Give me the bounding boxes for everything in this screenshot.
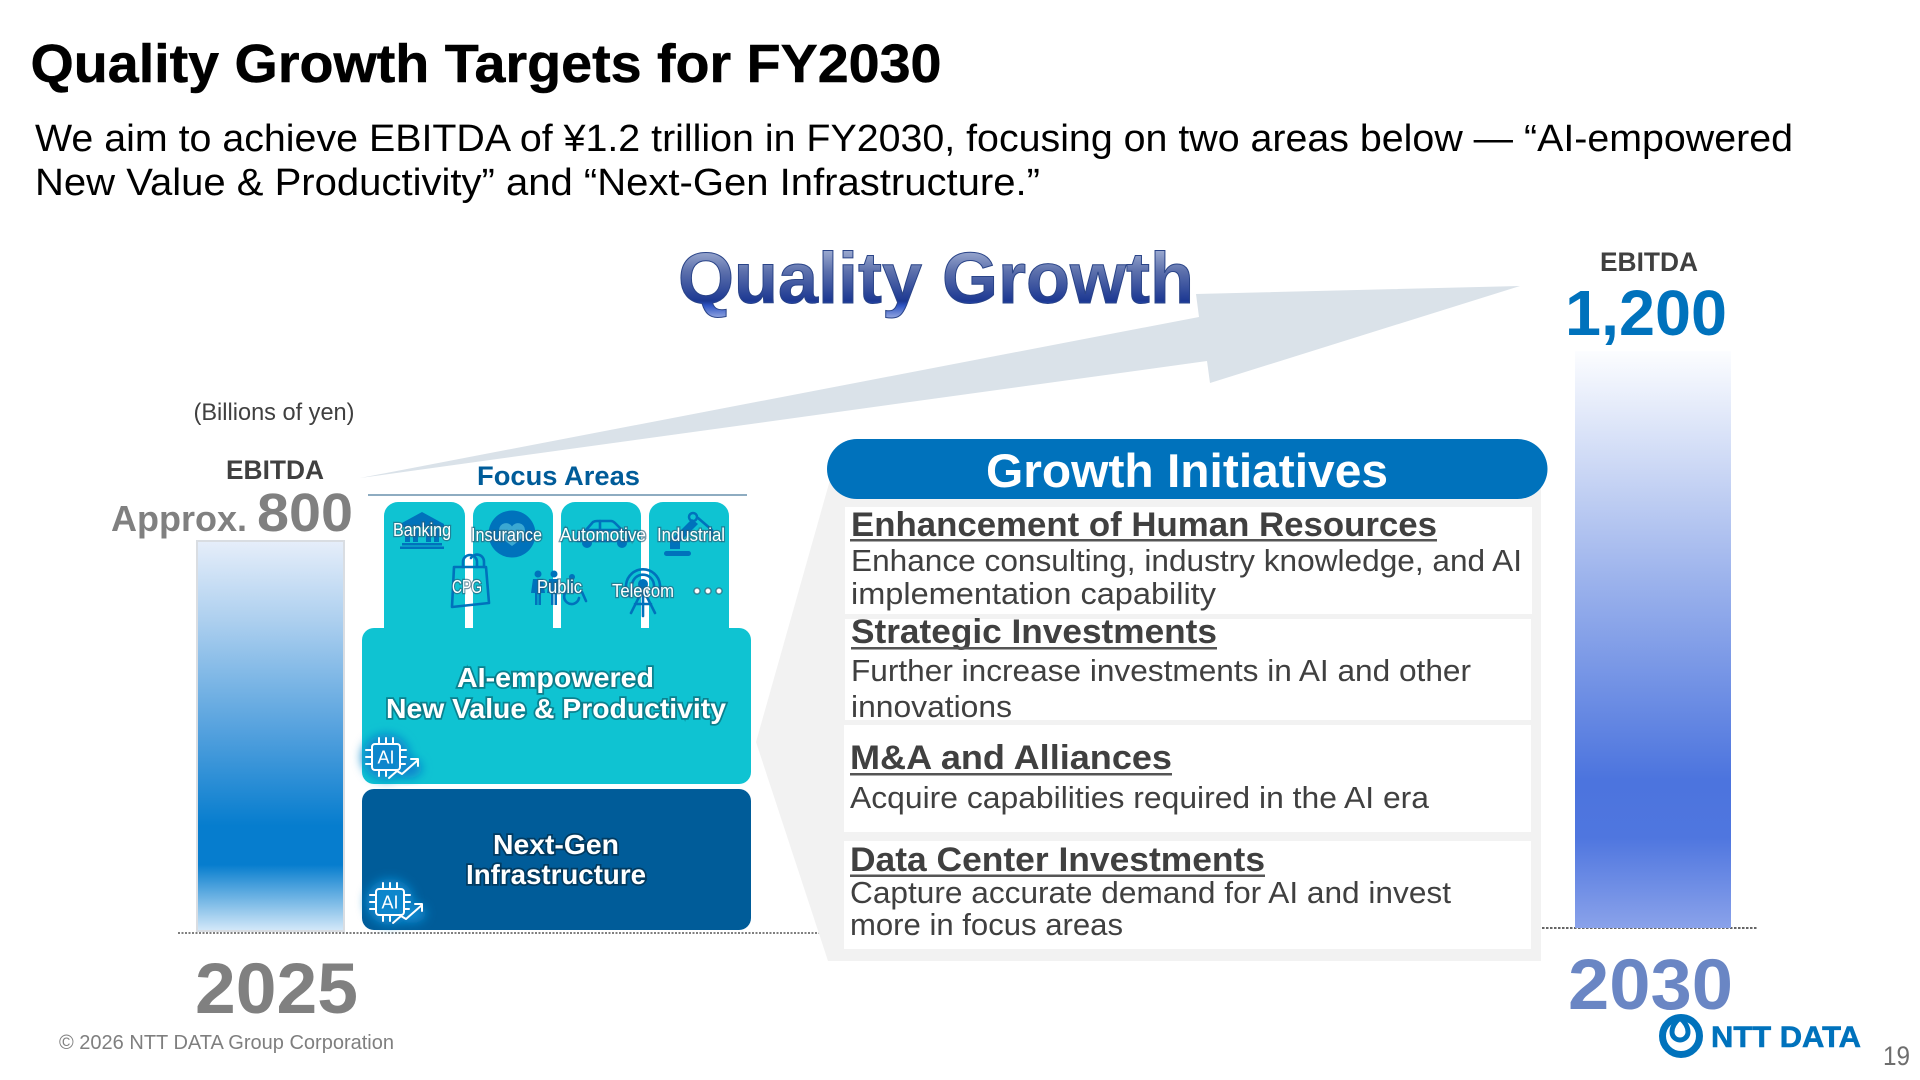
value 2030: 1,200 — [1565, 277, 1727, 349]
value 2025 — [111, 483, 353, 543]
growth initiatives header — [827, 439, 1548, 499]
focus labels: Telecom — [612, 581, 674, 601]
block label: next-gen: Next-Gen — [493, 829, 619, 860]
subtitle text block: We aim to achieve EBITDA of ¥1.2 trillion in FY2030, focusing on two areas below — “AI-empowered — [35, 118, 1793, 160]
value 2025: Approx. — [111, 498, 247, 539]
NTT DATA logo — [1662, 1018, 1861, 1054]
item: strategic investments: Further increase investments in AI and other — [851, 653, 1471, 688]
header label: Growth Initiatives — [986, 444, 1388, 497]
item: data center investments — [844, 841, 1531, 949]
copyright: © 2026 NTT DATA Group Corporation — [59, 1032, 394, 1054]
bar 2025 — [197, 541, 344, 931]
item: M&A and alliances — [844, 725, 1531, 832]
icon: AI chip growth infrastructure — [366, 879, 426, 925]
block label: AI-empowered: AI-empowered — [457, 662, 654, 693]
more indicator dots — [694, 588, 722, 594]
EBITDA 2025 label: EBITDA — [226, 455, 324, 485]
item: data center investments: Data Center Investments — [850, 841, 1265, 879]
icon: people and wheelchair — [531, 570, 586, 605]
focus labels: Public — [537, 577, 582, 597]
panel background — [756, 480, 1541, 961]
baseline right — [1542, 927, 1758, 929]
year 2030: 2030 — [1568, 946, 1733, 1025]
block label: next-gen — [466, 829, 646, 890]
block label: AI-empowered: New Value & Productivity — [386, 693, 726, 724]
title: Quality Growth Targets for FY2030 — [30, 34, 942, 94]
focus labels: Automotive — [560, 525, 646, 545]
item: M&A and alliances: Acquire capabilities required in the AI era — [850, 780, 1430, 815]
item: strategic investments — [845, 613, 1531, 724]
focus labels — [393, 520, 725, 601]
page number: 19 — [1883, 1041, 1910, 1071]
item: human resources: Enhancement of Human Resources — [851, 506, 1437, 544]
icon: industrial robot — [664, 513, 712, 556]
bar 2030 — [1575, 351, 1731, 928]
item: M&A and alliances: M&A and Alliances — [850, 739, 1172, 777]
focus labels: Industrial — [657, 525, 725, 545]
focus areas rule — [368, 494, 747, 496]
item: strategic investments: innovations — [851, 689, 1012, 724]
growth arrow — [360, 286, 1520, 478]
block label: AI-empowered — [386, 662, 726, 724]
subtitle text block: New Value & Productivity” and “Next-Gen Infrastructure.” — [35, 162, 1040, 204]
block label: next-gen: Infrastructure — [466, 859, 646, 890]
icon: bank — [400, 512, 444, 549]
icon: AI chip growth: AI — [377, 748, 395, 768]
item: strategic investments: Strategic Investments — [851, 613, 1217, 651]
block: next-gen infrastructure — [362, 789, 751, 930]
focus labels: CPG — [452, 577, 482, 597]
icon: AI chip growth infrastructure: AI — [381, 892, 399, 912]
icon: car — [578, 521, 629, 548]
item: human resources: implementation capability — [851, 576, 1217, 611]
item: human resources: Enhance consulting, industry knowledge, and AI — [851, 543, 1522, 578]
icon: AI chip growth — [362, 734, 422, 780]
focus labels: Insurance — [471, 525, 542, 545]
value 2025: 800 — [257, 483, 353, 543]
icon: telecom tower — [626, 569, 660, 616]
year 2025: 2025 — [195, 950, 358, 1029]
focus labels: Banking — [393, 520, 451, 540]
panel: growth initiatives — [756, 439, 1548, 961]
item: data center investments: more in focus areas — [850, 907, 1123, 942]
focus areas heading: Focus Areas — [477, 461, 640, 491]
subtitle text block — [35, 118, 1793, 204]
block: AI-empowered — [362, 628, 751, 784]
icon: insurance heart — [488, 510, 536, 558]
panel: focus areas — [362, 461, 751, 930]
baseline left — [178, 932, 822, 934]
quality growth heading: Quality Growth — [678, 239, 1194, 319]
item: human resources — [845, 506, 1532, 614]
unit label: (Billions of yen) — [194, 399, 354, 426]
icon: shopping bag — [452, 555, 489, 607]
NTT DATA logo: NTT DATA — [1711, 1021, 1861, 1054]
focus tile columns — [384, 502, 729, 632]
EBITDA 2030 label: EBITDA — [1600, 247, 1698, 277]
item: data center investments: Capture accurate demand for AI and invest — [850, 875, 1451, 910]
